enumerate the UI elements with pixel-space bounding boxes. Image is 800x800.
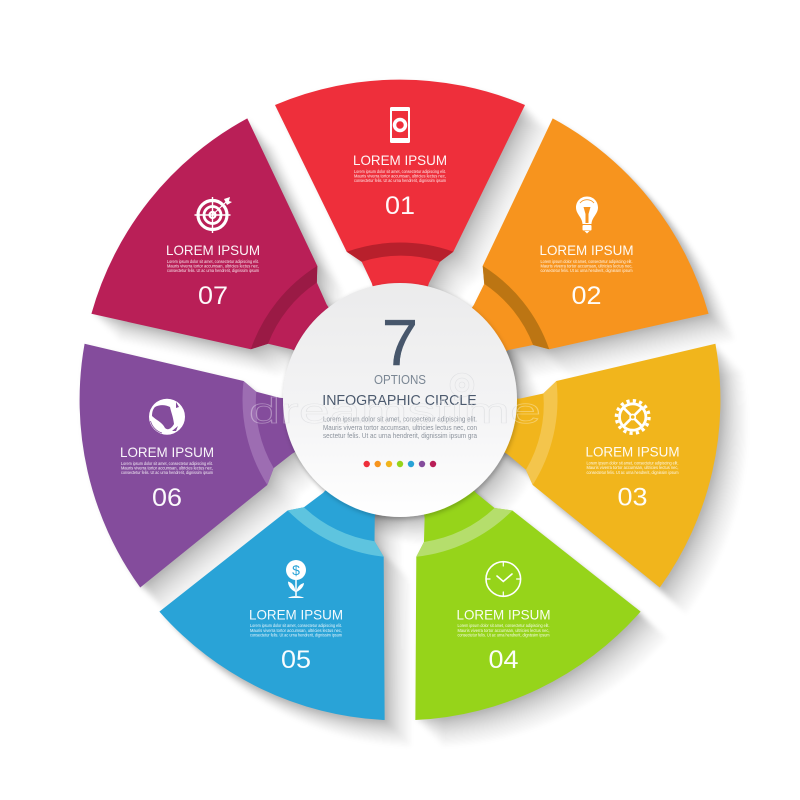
text: dreamstime [249, 390, 541, 431]
icon: smartphone [390, 107, 410, 143]
heading: 04: LOREM IPSUM [456, 606, 550, 622]
icon: money plant: $ [292, 562, 300, 578]
text block: 07: Mauris viverra tortor accumsan, ultricies lectus nec, [167, 264, 259, 268]
text block: 04: Mauris viverra tortor accumsan, ultricies lectus nec, [458, 628, 550, 633]
text block: 07: consectetur felis. Ut ac urna hendrerit, dignissim ipsum [167, 268, 259, 273]
number: 06: 06 [152, 484, 182, 512]
panel: center circle [283, 283, 517, 517]
text block: 02: Mauris viverra tortor accumsan, ultricies lectus nec, [540, 264, 632, 268]
panel: segment 05 [148, 427, 474, 743]
number: 01: 01 [385, 192, 415, 220]
text block: 03: Lorem ipsum dolor sit amet, consectetur adipiscing elit. [586, 460, 678, 466]
number: 03: 03 [618, 484, 648, 512]
text block: 02: Lorem ipsum dolor sit amet, consectetur adipiscing elit. [540, 259, 632, 264]
heading: 02: LOREM IPSUM [540, 242, 634, 258]
text block: 01: Mauris viverra tortor accumsan, ultricies lectus nec, [354, 174, 446, 178]
color dots [364, 461, 436, 467]
panel: segment 03 [460, 298, 740, 593]
heading: infographic circle: INFOGRAPHIC CIRCLE [322, 392, 477, 409]
text block: center description [323, 415, 478, 440]
number: 07: 07 [198, 282, 228, 310]
text: dreamstime [249, 390, 541, 431]
text block: 01: consectetur felis. Ut ac urna hendrerit, dignissim ipsum [354, 178, 446, 183]
heading: 05: LOREM IPSUM [249, 606, 343, 622]
text block: 03 [586, 460, 679, 475]
panel: segment 07 [72, 102, 408, 442]
text block: 07 [167, 259, 259, 273]
text block: 05 [250, 623, 342, 638]
text block: 02: consectetur felis. Ut ac urna hendrerit, dignissim ipsum [540, 268, 633, 273]
heading: 01: LOREM IPSUM [353, 152, 447, 168]
icon: gear [616, 401, 649, 433]
long shadows [61, 81, 766, 769]
text block: 05: Lorem ipsum dolor sit amet, consectetur adipiscing elit. [250, 623, 342, 628]
panel: segment 06 [60, 298, 340, 593]
icon: money plant [286, 560, 306, 598]
number: 04: 04 [488, 646, 519, 674]
heading: 03: LOREM IPSUM [586, 444, 680, 460]
text block: 06: Lorem ipsum dolor sit amet, consectetur adipiscing elit. [121, 461, 213, 466]
text block: 03: Mauris viverra tortor accumsan, ultricies lectus nec, [586, 465, 678, 470]
text block: 06 [121, 461, 213, 475]
heading: 07: LOREM IPSUM [166, 242, 260, 258]
text block: 05: Mauris viverra tortor accumsan, ultricies lectus nec, [250, 628, 342, 633]
text block: 05: consectetur felis. Ut ac urna hendrerit, dignissim ipsum [250, 632, 342, 638]
icon: clock [486, 562, 521, 596]
text block: 04 [458, 623, 550, 638]
label: options: OPTIONS [374, 373, 426, 387]
text block: 01: Lorem ipsum dolor sit amet, consectetur adipiscing elit. [354, 169, 446, 174]
icon: light bulb [576, 196, 598, 234]
text block: 04: Lorem ipsum dolor sit amet, consectetur adipiscing elit. [458, 623, 550, 628]
text block: 01 [354, 169, 446, 183]
icon: globe [149, 399, 185, 435]
icon: target [194, 197, 232, 233]
text block: 07: Lorem ipsum dolor sit amet, consectetur adipiscing elit. [167, 259, 259, 264]
text block: 04: consectetur felis. Ut ac urna hendrerit, dignissim ipsum [458, 632, 550, 638]
panel: segment 02 [392, 102, 728, 442]
number: 05: 05 [281, 646, 311, 674]
panel: segment 04 [326, 427, 652, 743]
text block: 06: Mauris viverra tortor accumsan, ultricies lectus nec, [121, 466, 213, 470]
text block: 03: consectetur felis. Ut ac urna hendrerit, dignissim ipsum [586, 470, 679, 475]
text block: 06: consectetur felis. Ut ac urna hendrerit, dignissim ipsum [121, 470, 213, 475]
panel: segment 01 [275, 80, 525, 310]
text block: 02 [540, 259, 633, 273]
text block: center description: Lorem ipsum dolor sit amet, consectetur adipiscing elit. [323, 415, 477, 424]
text block: center description: sectetur felis. Ut ac urna hendrerit, dignissim ipsum gra [323, 431, 478, 440]
heading: 06: LOREM IPSUM [120, 444, 214, 460]
text block: center description: Mauris viverra tortor accumsan, ultricies lectus nec, con [323, 423, 477, 432]
big number 7: 7 [382, 306, 418, 379]
number: 02: 02 [572, 282, 602, 310]
